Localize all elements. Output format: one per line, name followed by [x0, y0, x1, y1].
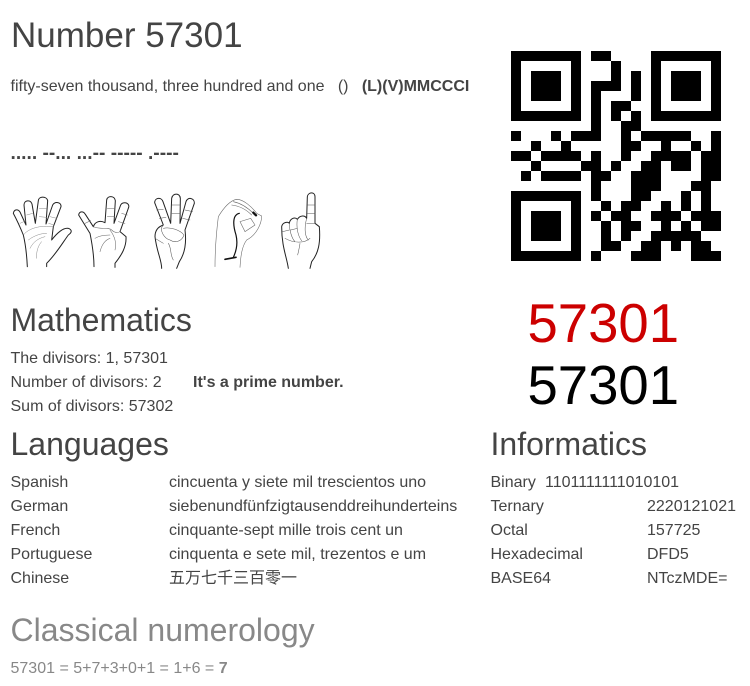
text: number of divisors: Number of divisors: 2 — [10, 374, 162, 391]
panel: informatics table: 157725 — [647, 522, 700, 539]
panel: languages table: siebenundfünfzigtausenddreihunderteins — [169, 498, 457, 515]
panel: languages table: cincuenta y siete mil trescientos uno — [169, 474, 426, 491]
panel: languages table: cinquante-sept mille trois cent un — [169, 522, 403, 539]
text: divisors: The divisors: 1, 57301 — [10, 350, 168, 367]
panel: informatics table: Ternary — [490, 498, 544, 515]
QR code — [511, 51, 721, 261]
heading: Informatics: Informatics — [490, 426, 647, 462]
panel: languages table: German — [10, 498, 68, 515]
icon: hand seven — [79, 197, 129, 267]
icon: hand one — [282, 193, 320, 268]
panel: languages table: cinquenta e sete mil, trezentos e um — [169, 546, 426, 563]
panel: informatics table: Octal — [490, 522, 528, 539]
heading: Mathematics: Mathematics — [10, 302, 192, 338]
panel: languages table: Portuguese — [10, 546, 92, 563]
icon: hand zero — [215, 199, 262, 267]
heading: Classical numerology: Classical numerology — [10, 612, 315, 648]
panel: informatics table — [490, 474, 736, 587]
panel: informatics table: Hexadecimal — [490, 546, 583, 563]
panel: languages table: 五万七千三百零一 — [169, 570, 297, 587]
red number: 57301 — [528, 293, 679, 354]
morse code: ..... --... ...-- ----- .---- — [10, 143, 179, 164]
title: Number 57301 — [11, 16, 243, 55]
text: prime number note: It's a prime number. — [193, 374, 344, 391]
icon: hand five — [13, 197, 71, 267]
panel: informatics table: BASE64 — [490, 570, 551, 587]
icon: sign language hands — [12, 192, 320, 269]
panel: informatics table: 2220121021 — [647, 498, 736, 515]
panel: languages table: French — [10, 522, 60, 539]
panel: informatics table: NTczMDE= — [647, 570, 727, 587]
panel: languages table: Spanish — [10, 474, 68, 491]
text: numerology calculation: 57301 = 5+7+3+0+1 = 1+6 = 7 — [10, 660, 228, 677]
panel: informatics table: 1101111111010101 — [545, 474, 679, 491]
number in words and Roman numeral: fifty-seven thousand, three hundred and one () (L)(V)MMCCCI — [10, 78, 469, 95]
panel: informatics table: Binary — [490, 474, 536, 491]
black number: 57301 — [528, 355, 679, 416]
panel: languages table: Chinese — [10, 570, 69, 587]
panel: languages table — [10, 474, 457, 587]
icon: hand three — [155, 194, 194, 268]
heading: Languages: Languages — [10, 426, 169, 462]
text: sum of divisors: Sum of divisors: 57302 — [10, 398, 173, 415]
panel: informatics table: DFD5 — [647, 546, 689, 563]
